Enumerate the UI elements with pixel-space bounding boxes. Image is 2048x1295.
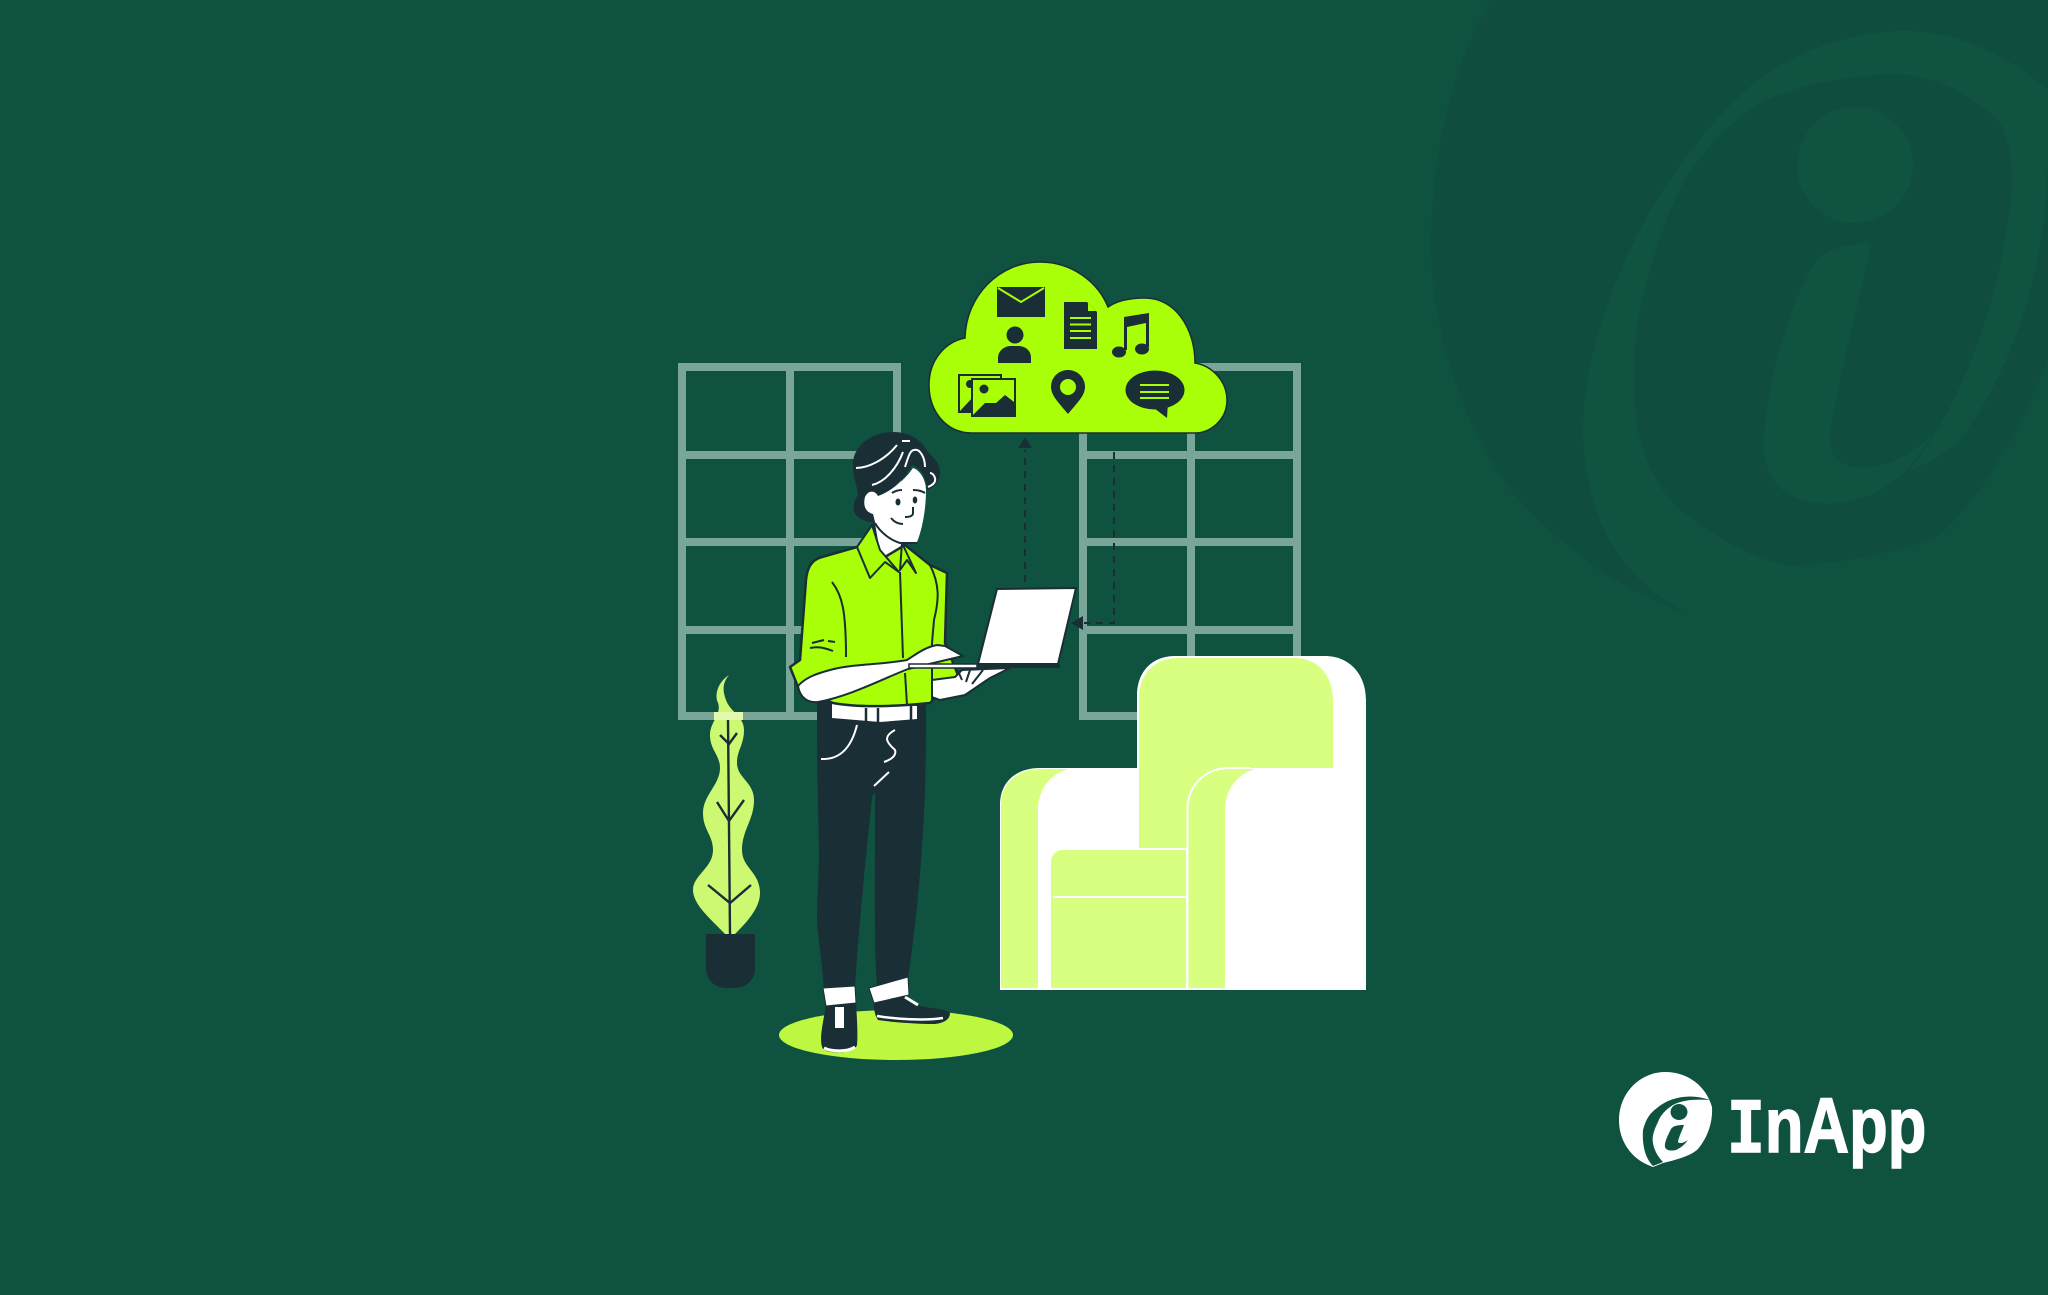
face details bbox=[891, 490, 925, 524]
logo mark bbox=[1619, 1072, 1712, 1167]
laptop screen bbox=[978, 588, 1076, 664]
shirt bbox=[790, 545, 958, 706]
cloud with icons bbox=[929, 262, 1227, 433]
icon: speech bubble bbox=[1126, 370, 1184, 418]
neck bbox=[872, 512, 905, 575]
icon: envelope bbox=[997, 287, 1045, 317]
icon: music note bbox=[1112, 313, 1149, 358]
icon: document bbox=[1064, 302, 1097, 349]
arrow: cloud down to laptop bbox=[1071, 452, 1114, 630]
ground ellipse bbox=[779, 1010, 1013, 1060]
icon: location pin bbox=[1051, 370, 1085, 414]
plant pot bbox=[706, 934, 755, 988]
trousers bbox=[817, 700, 926, 990]
right hand bbox=[932, 668, 1010, 700]
cloud shape bbox=[929, 262, 1227, 433]
logo: InApp bbox=[1619, 1072, 1926, 1176]
right shoe bbox=[869, 977, 950, 1024]
belt bbox=[832, 704, 917, 722]
left shoe bbox=[821, 986, 857, 1052]
plant leaf bbox=[693, 675, 760, 934]
shirt folds bbox=[810, 565, 938, 705]
armchair seat bbox=[1051, 850, 1186, 988]
armchair back cushion bbox=[1139, 658, 1333, 848]
window: left bbox=[682, 367, 897, 716]
armchair body bbox=[1000, 656, 1366, 990]
window bar over plant bbox=[714, 712, 743, 720]
collar bbox=[857, 525, 899, 578]
logo wordmark: InApp bbox=[1727, 1083, 1926, 1176]
armchair left arm bbox=[1001, 769, 1068, 988]
laptop bbox=[909, 588, 1076, 684]
icon: images bbox=[959, 375, 1015, 416]
laptop base bbox=[909, 664, 977, 668]
trouser details bbox=[821, 725, 895, 786]
icon: person bbox=[998, 326, 1031, 363]
arrow: laptop up to cloud bbox=[1018, 437, 1032, 582]
watermark: InApp logo mark bbox=[1431, 0, 2048, 620]
person bbox=[790, 432, 1010, 1052]
hair highlights bbox=[856, 441, 935, 487]
face bbox=[864, 468, 926, 543]
armchair right arm bbox=[1188, 769, 1255, 990]
window: right bbox=[1083, 367, 1297, 716]
fingers bbox=[958, 670, 983, 684]
armchair bbox=[1000, 656, 1366, 990]
left arm bbox=[798, 645, 963, 702]
plant bbox=[693, 675, 760, 988]
plant veins bbox=[708, 720, 751, 934]
hair bbox=[853, 432, 940, 522]
